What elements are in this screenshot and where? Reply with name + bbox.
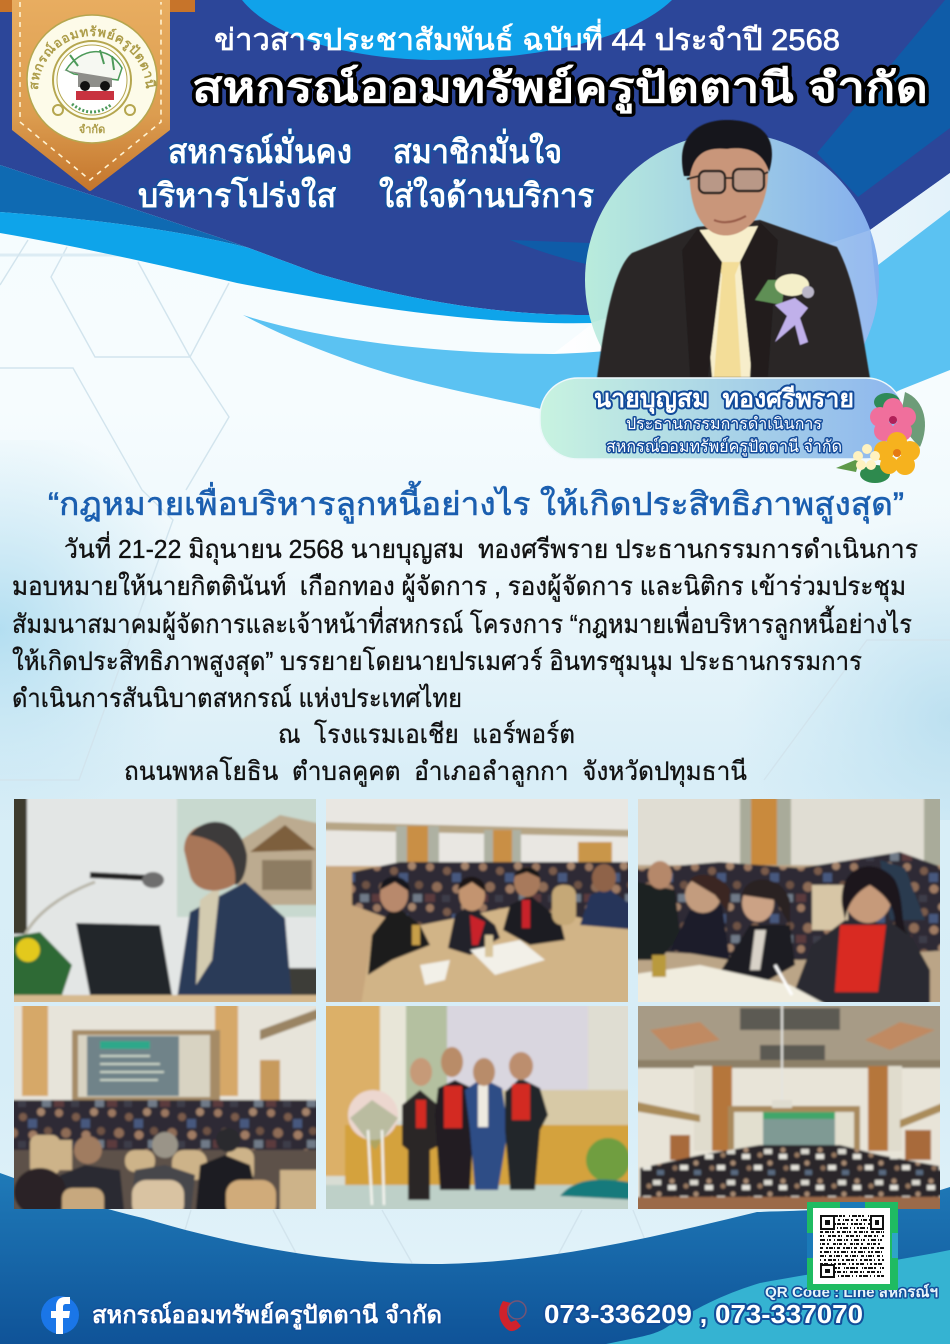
footer teal curve — [606, 1250, 950, 1344]
article body text: ถนนพหลโยธิน ตำบลคูคต อำเภอลำลูกกา จังหวัดปทุมธานี — [124, 756, 747, 787]
QR frame over caption — [807, 1284, 898, 1290]
article body text: มอบหมายให้นายกิตตินันท์ เกือกทอง ผู้จัดการ , รองผู้จัดการ และนิติกร เข้าร่วมประชุม — [12, 571, 906, 602]
icon: phone — [499, 1301, 526, 1331]
ribbon top band — [0, 0, 195, 12]
header: light blue swoosh — [243, 210, 950, 440]
header: left medium blue wave — [0, 165, 249, 248]
slogans: สมาชิกมั่นใจ — [393, 128, 562, 170]
article body text: ให้เกิดประสิทธิภาพสูงสุด” บรรยายโดยนายปรเมศวร์ อินทรชุมนุม ประธานกรรมการ — [12, 646, 862, 677]
footer phone numbers: 073-336209 , 073-337070 — [544, 1299, 863, 1329]
header title: cooperative name: สหกรณ์ออมทรัพย์ครูปัตตานี จำกัด — [192, 64, 928, 114]
portrait: chairman — [597, 120, 870, 378]
footer cooperative name: สหกรณ์ออมทรัพย์ครูปัตตานี จำกัด — [92, 1301, 442, 1330]
logo seal — [26, 14, 158, 144]
header: medium blue diagonal band — [817, 0, 950, 197]
article body text — [12, 531, 918, 787]
chairman name: นายบุญสม ทองศรีพราย — [594, 385, 854, 415]
logo seal: สหกรณ์ออมทรัพย์ครูปัตตานี — [30, 25, 157, 90]
logo seal: จำกัด — [79, 123, 105, 136]
slogans: บริหารโปร่งใส — [138, 176, 337, 214]
photo: speaker at lectern — [14, 799, 316, 1002]
portrait background circle — [585, 138, 879, 348]
header title: newsletter issue: ข่าวสารประชาสัมพันธ์ ฉบับที่ 44 ประจำปี 2568 — [214, 19, 840, 57]
photo: full group in hall — [638, 1006, 940, 1209]
photo: group of four with flowers — [326, 1006, 628, 1209]
corsage — [755, 274, 814, 345]
photo: attendees close-up — [638, 799, 940, 1002]
QR caption: QR Code : Line สหกรณ์ฯ — [765, 1283, 938, 1301]
header: navy background — [0, 0, 950, 440]
header: bright blue arc at top — [242, 0, 672, 60]
photo: lecture hall from the back — [14, 1006, 316, 1209]
chairman title: ประธานกรรมการดำเนินการ — [626, 416, 822, 433]
header: bright blue wave — [0, 212, 620, 325]
article body text: วันที่ 21-22 มิถุนายน 2568 นายบุญสม ทองศรีพราย ประธานกรรมการดำเนินการ — [64, 531, 918, 565]
photo: seminar attendees front row — [326, 799, 628, 1002]
article headline: “กฎหมายเพื่อบริหารลูกหนี้อย่างไร ให้เกิดประสิทธิภาพสูงสุด” — [48, 481, 904, 524]
QR frame gaps — [807, 1202, 865, 1258]
slogans: สหกรณ์มั่นคง — [168, 128, 352, 170]
article body text: ดำเนินการสันนิบาตสหกรณ์ แห่งประเทศไทย — [12, 683, 462, 713]
footer wave — [0, 1173, 950, 1344]
chairman organisation: สหกรณ์ออมทรัพย์ครูปัตตานี จำกัด — [606, 437, 842, 457]
header: right white band — [553, 173, 950, 354]
header: small medium blue streak — [510, 240, 590, 265]
slogans: ใส่ใจด้านบริการ — [379, 176, 594, 214]
icon: tropical flowers — [836, 392, 925, 483]
slogans — [138, 128, 594, 214]
icon: facebook — [41, 1296, 79, 1334]
name plate — [540, 378, 904, 459]
gold ribbon with logo — [12, 0, 170, 191]
article body text: ณ โรงแรมเอเชีย แอร์พอร์ต — [278, 719, 575, 749]
background hexagon lines — [0, 240, 950, 1263]
QR code — [807, 1202, 898, 1290]
